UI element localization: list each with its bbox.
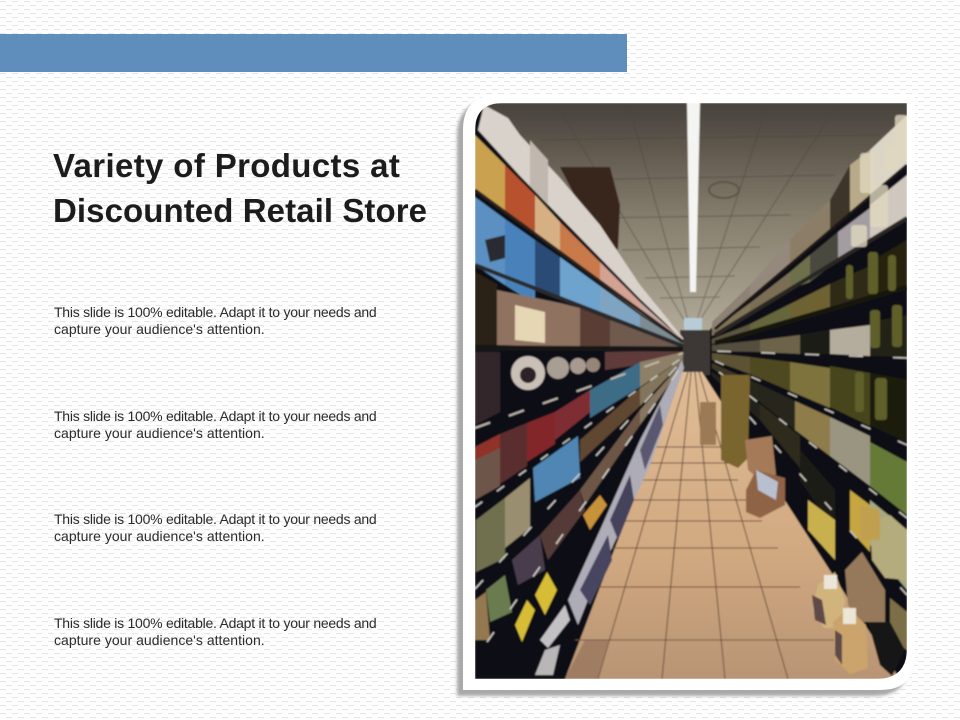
right shelf rails (715, 165, 907, 595)
text block 3 (54, 511, 376, 544)
text block 2: capture your audience's attention. (54, 425, 265, 441)
ceiling light (687, 103, 700, 292)
photo: supermarket aisle (475, 103, 907, 679)
text block 2 (54, 408, 376, 441)
title: Variety of Products at (53, 147, 400, 184)
oil jugs on the floor (808, 500, 907, 674)
text block 3: This slide is 100% editable. Adapt it to your needs and (54, 511, 376, 527)
dark header sign (560, 167, 620, 250)
text block 4: This slide is 100% editable. Adapt it to your needs and (54, 615, 376, 631)
white rounded photo frame (463, 95, 915, 690)
left shelf price rails (475, 190, 683, 642)
text block 2: This slide is 100% editable. Adapt it to your needs and (54, 408, 376, 424)
stacked cartons on the floor (700, 375, 785, 518)
floor tile lines (575, 372, 835, 679)
far wall sign (684, 318, 702, 330)
text block 1: capture your audience's attention. (54, 321, 265, 337)
ceiling tile lines (588, 157, 834, 320)
text block 4 (54, 615, 376, 648)
left shelves (475, 105, 684, 675)
floor stains (565, 640, 610, 679)
title: Discounted Retail Store (53, 192, 427, 229)
text block 1 (54, 304, 376, 337)
top blue bar (0, 34, 627, 72)
bottle highlights (851, 115, 907, 247)
title (53, 147, 427, 229)
text block 3: capture your audience's attention. (54, 528, 265, 544)
text block 4: capture your audience's attention. (54, 632, 265, 648)
frame shadow (457, 101, 909, 696)
right shelves (712, 115, 907, 676)
floor (565, 372, 900, 679)
text block 1: This slide is 100% editable. Adapt it to your needs and (54, 304, 376, 320)
ceiling (475, 103, 907, 340)
